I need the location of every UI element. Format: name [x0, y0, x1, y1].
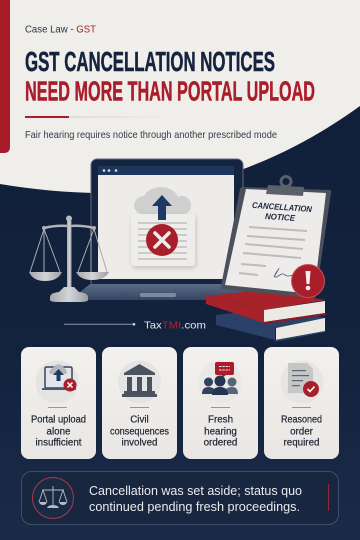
- title rule: [25, 116, 160, 118]
- card label: Portal upload: [31, 414, 86, 426]
- card label: Civil: [130, 414, 149, 426]
- subtitle: Fair hearing requires notice through another prescribed mode: [25, 130, 277, 141]
- card label: [110, 414, 169, 448]
- illustration: clipboard: [221, 176, 331, 298]
- clipboard heading: CANCELLATION: [252, 200, 313, 214]
- card label: [281, 414, 322, 448]
- icon: people with speech bubble: [202, 362, 238, 395]
- clipboard heading: NOTICE: [265, 211, 296, 223]
- card label: [204, 414, 237, 448]
- card label: required: [284, 438, 319, 448]
- card: portal upload: [21, 347, 96, 459]
- signature: [274, 269, 293, 277]
- card label: order: [290, 426, 314, 438]
- card label: insufficient: [36, 438, 82, 448]
- header text: [25, 24, 315, 141]
- icon: alert badge: [292, 264, 324, 298]
- kicker: Case Law - GST: [25, 24, 96, 36]
- brand: TaxTMI.com: TaxTMI.com: [144, 320, 206, 332]
- red book: [206, 290, 326, 324]
- icon: scales badge: [32, 478, 74, 518]
- card label: Fresh: [208, 414, 233, 426]
- navy book: [216, 308, 326, 342]
- icon: rejected document: [131, 195, 196, 268]
- card label: alone: [47, 426, 71, 438]
- illustration: scales of justice: [29, 216, 109, 302]
- card label: ordered: [204, 438, 237, 448]
- card label: consequences: [110, 426, 169, 438]
- card: reasoned order: [264, 347, 339, 459]
- icon: upload cloud: [134, 187, 191, 214]
- icon: document with check: [288, 363, 319, 397]
- red accent bar: [0, 0, 10, 153]
- conclusion text: [89, 484, 302, 514]
- clipboard clip: [266, 176, 304, 196]
- conclusion panel: [22, 472, 338, 524]
- card label: Reasoned: [281, 414, 322, 426]
- clipboard text lines: [239, 227, 307, 275]
- title: [25, 46, 315, 106]
- illustration: books: [206, 290, 326, 342]
- card: fresh hearing: [183, 347, 258, 459]
- illustration: laptop: [74, 159, 282, 300]
- card label: hearing: [204, 426, 237, 438]
- conclusion text: Cancellation was set aside; status quo: [89, 484, 302, 498]
- card label: involved: [122, 438, 157, 448]
- icon: courthouse: [122, 364, 157, 397]
- conclusion text: continued pending fresh proceedings.: [89, 500, 300, 514]
- card label: [31, 414, 86, 448]
- clipboard heading: [252, 200, 313, 223]
- card: civil consequences: [102, 347, 177, 459]
- icon: laptop upload: [42, 364, 76, 392]
